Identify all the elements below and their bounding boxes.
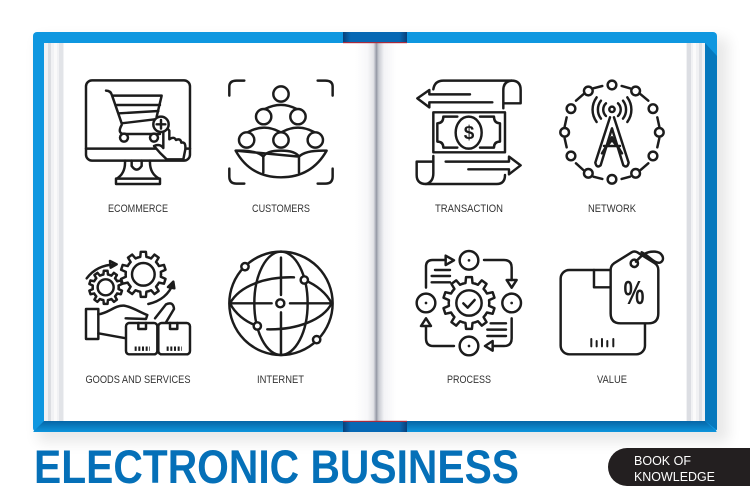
cover inner bottom edge bbox=[33, 421, 717, 432]
icon: percent sign: % bbox=[624, 274, 644, 311]
cover inner right edge bbox=[705, 43, 717, 430]
label: customers: CUSTOMERS bbox=[252, 203, 310, 215]
badge text line two: KNOWLEDGE bbox=[634, 469, 715, 484]
icon: gears, hand and boxes bbox=[86, 252, 190, 354]
book bbox=[33, 32, 728, 442]
book shadow bbox=[38, 38, 728, 442]
label: internet: INTERNET bbox=[257, 374, 304, 386]
icon: dollar sign: $ bbox=[464, 123, 475, 144]
spine bottom bbox=[343, 421, 407, 432]
panel: internet bbox=[229, 252, 333, 386]
icon: box with price tag bbox=[561, 251, 663, 354]
icon: process cycle with gear bbox=[417, 251, 521, 355]
panel: process bbox=[417, 251, 521, 386]
label: goods and services: GOODS AND SERVICES bbox=[86, 374, 190, 386]
label: ecommerce: ECOMMERCE bbox=[108, 203, 168, 215]
panel: value bbox=[561, 251, 663, 386]
label: process: PROCESS bbox=[447, 374, 491, 386]
icon: globe with nodes bbox=[229, 252, 333, 355]
right page bbox=[376, 43, 705, 421]
label: transaction: TRANSACTION bbox=[435, 203, 503, 215]
spine top bbox=[343, 32, 407, 43]
badge background bbox=[608, 448, 750, 486]
panel: network bbox=[560, 81, 664, 215]
left page stack bbox=[44, 43, 64, 421]
label: value: VALUE bbox=[597, 374, 627, 386]
right page stack bbox=[686, 43, 705, 421]
icon: money scroll bbox=[417, 81, 521, 184]
panel: customers bbox=[229, 81, 333, 215]
icon: monitor with cart bbox=[86, 80, 190, 184]
right page gutter shading bbox=[376, 43, 396, 421]
book cover bbox=[33, 32, 717, 432]
left page bbox=[44, 43, 376, 421]
panel: goods and services bbox=[86, 252, 190, 386]
label: network: NETWORK bbox=[588, 203, 637, 215]
panel: ecommerce bbox=[86, 80, 190, 215]
icon: antenna with node ring bbox=[560, 81, 664, 184]
panel: transaction bbox=[417, 81, 521, 215]
title: ELECTRONIC BUSINESS bbox=[34, 440, 519, 493]
left page gutter shading bbox=[355, 43, 376, 421]
badge: book of knowledge bbox=[608, 448, 750, 486]
badge text: BOOK OF bbox=[634, 453, 691, 468]
icon: customers group bbox=[229, 81, 333, 184]
